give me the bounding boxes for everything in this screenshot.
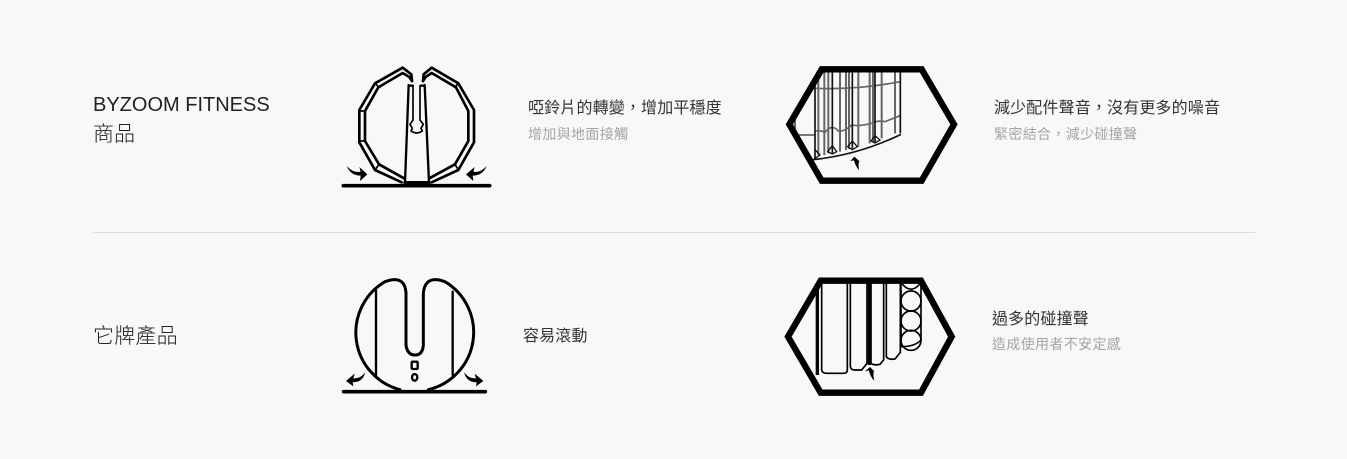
text: other brand noise <box>992 310 1121 352</box>
row heading: BYZOOM FITNESS products: 商品 <box>93 123 135 146</box>
text: BYZOOM plate benefit: 增加與地面接觸 <box>528 126 628 142</box>
hole marks <box>412 362 418 381</box>
arrow: up <box>865 367 875 381</box>
arrow: right inward <box>466 166 487 181</box>
arrow: right outward <box>464 372 483 386</box>
text: BYZOOM noise benefit: 減少配件聲音，沒有更多的噪音 <box>994 100 1220 117</box>
hexagon frame <box>788 281 952 393</box>
row heading: BYZOOM FITNESS products: BYZOOM FITNESS <box>93 94 270 116</box>
text: other brand noise: 造成使用者不安定感 <box>992 336 1121 352</box>
divider <box>93 232 1255 233</box>
arrow: left outward <box>346 372 365 386</box>
text: BYZOOM plate benefit: 啞鈴片的轉變，增加平穩度 <box>528 100 722 117</box>
icon: other brand round plate on floor <box>342 278 488 394</box>
floor line <box>344 386 485 397</box>
icon: BYZOOM dumbbell plate on floor <box>341 66 492 188</box>
row heading: other brand products: 它牌產品 <box>93 325 178 348</box>
arrow: up <box>850 157 861 170</box>
row heading: BYZOOM FITNESS products <box>93 94 270 146</box>
floor line <box>343 180 490 191</box>
text: other brand rolling: 容易滾動 <box>523 328 588 345</box>
text: BYZOOM plate benefit <box>528 99 722 142</box>
icon: other brand plates in hexagon <box>784 278 956 396</box>
icon: BYZOOM plates in hexagon <box>786 66 958 184</box>
arrow: left inward <box>347 166 367 181</box>
text: other brand noise: 過多的碰撞聲 <box>992 311 1089 328</box>
text: BYZOOM noise benefit: 緊密結合，減少碰撞聲 <box>994 126 1138 142</box>
text: BYZOOM noise benefit <box>994 99 1220 142</box>
hexagon frame <box>789 69 954 181</box>
